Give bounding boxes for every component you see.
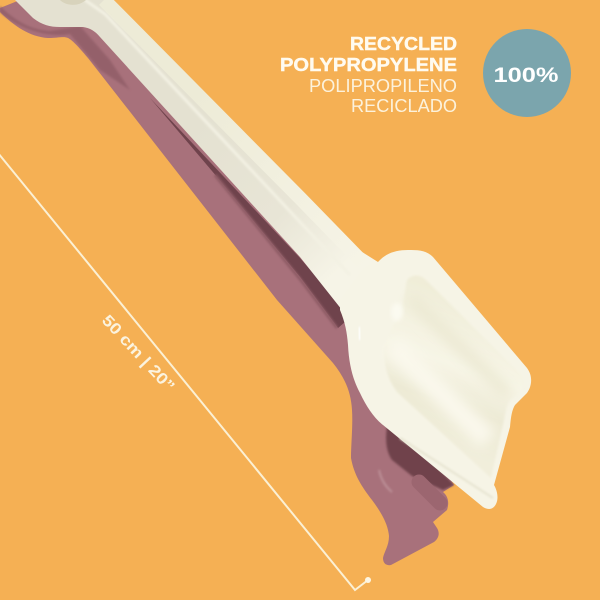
scoop body [340, 250, 531, 509]
english label: RECYCLED [350, 33, 457, 54]
scoop lighter band [392, 345, 488, 440]
lip shadow [400, 438, 493, 498]
dimension end dot [365, 577, 371, 583]
scoop inner well [384, 276, 524, 478]
product: cream scoop and handle [15, 0, 531, 509]
english label [280, 33, 457, 75]
handle ridge [85, 0, 350, 275]
dimension label: 50 cm | 20” [98, 312, 177, 395]
product: mauve scraper behind [0, 0, 454, 565]
badge: 100% [483, 29, 571, 117]
english label: POLYPROPYLENE [280, 54, 457, 75]
spanish label: RECICLADO [351, 95, 457, 116]
dark recess under scoop [386, 420, 454, 490]
handle [15, 0, 378, 310]
spanish label [309, 75, 457, 116]
mauve darker top curve [0, 6, 130, 90]
badge: 100%: 100% [494, 64, 559, 87]
mauve inner crease [379, 470, 392, 492]
mauve darker shadow under handle [150, 98, 345, 328]
scoop gloss [359, 327, 360, 340]
heading: material [280, 33, 457, 116]
handle top eye [60, 0, 86, 5]
scoop shade band [410, 298, 508, 394]
mauve edge shade [215, 175, 337, 328]
handle upper rim [104, 0, 372, 272]
scoop bump [391, 303, 403, 321]
dimension line [0, 153, 371, 590]
spanish label: POLIPROPILENO [309, 75, 457, 96]
mauve knob [419, 482, 440, 503]
